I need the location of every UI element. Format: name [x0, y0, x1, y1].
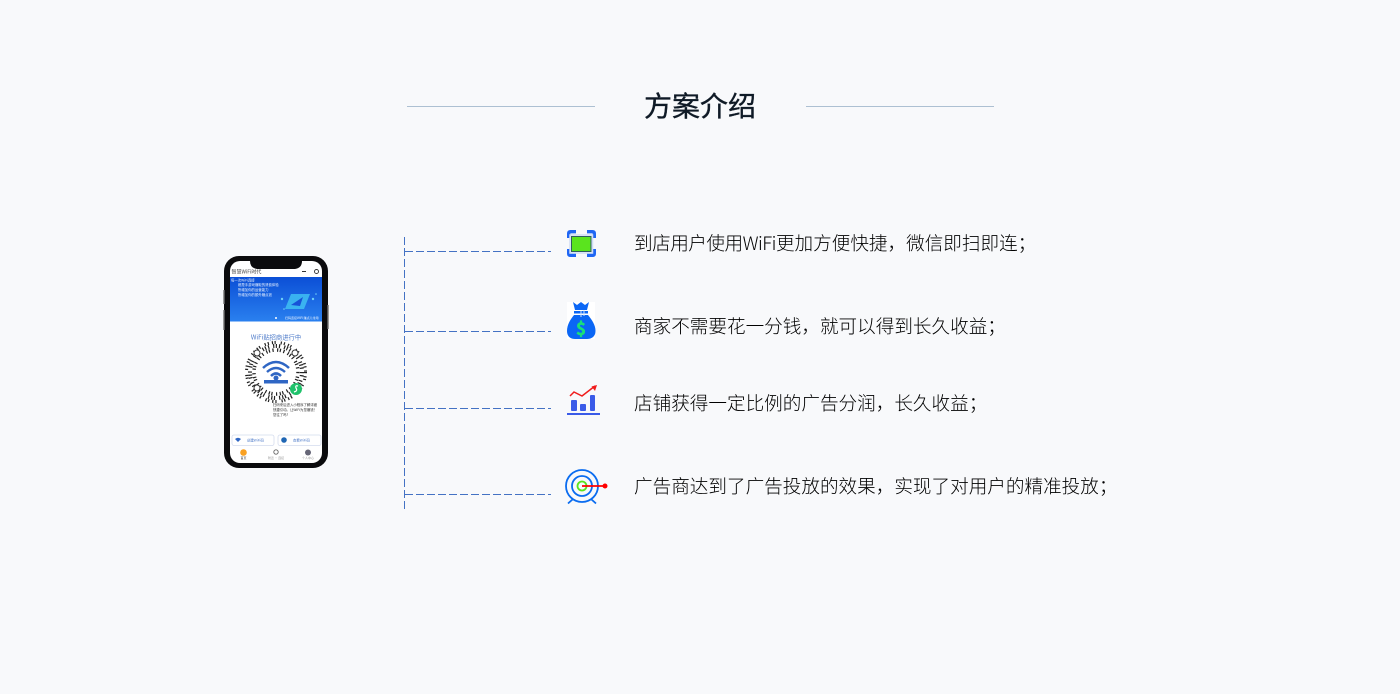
description: 扫码来后进入小程序了解详细	[273, 402, 318, 407]
recruiting heading: WiFi贴招商进行中	[251, 332, 301, 342]
button right: 查看WiFi码	[293, 438, 310, 442]
text: benefit 3: 店铺获得一定比例的广告分润，长久收益；	[634, 389, 987, 416]
tab bar: 附近 · 连接	[268, 455, 284, 460]
icon: scan frame	[569, 232, 594, 255]
title: 方案介绍	[644, 85, 756, 125]
icon: target	[566, 470, 608, 504]
title rule left	[407, 106, 595, 107]
banner: 每一次WiFi连接	[231, 278, 255, 282]
icon: money bag	[567, 302, 596, 340]
tab bar: 首页	[240, 455, 247, 460]
description: 您往了吗?	[273, 412, 289, 417]
QR mini-program code	[246, 342, 306, 402]
title rule right	[806, 106, 994, 107]
button right	[278, 435, 321, 446]
button left	[232, 435, 274, 446]
banner: 都是手游戏赚取的清费体验	[238, 282, 279, 287]
button left: 创建WiFi码	[247, 438, 264, 442]
banner: 所增加你的运营能力	[238, 287, 269, 292]
description	[273, 402, 318, 417]
description: 快捷引动。让WiFi为您赚钱！	[273, 407, 317, 412]
tab bar: 个人中心	[302, 455, 314, 460]
banner: 所增加你的额外赚点钱	[238, 292, 273, 297]
notch	[250, 261, 302, 269]
banner	[230, 277, 322, 322]
tab bar	[240, 449, 314, 460]
text: benefit 1: 到店用户使用WiFi更加方便快捷，微信即扫即连；	[634, 229, 1036, 256]
dashed connector tree	[404, 237, 551, 510]
icon: growth chart	[567, 385, 600, 415]
phone mockup	[223, 256, 329, 468]
app header: 智慧WiFi时代	[232, 268, 261, 276]
text: benefit 4: 广告商达到了广告投放的效果，实现了对用户的精准投放；	[634, 472, 1117, 499]
text: benefit 2: 商家不需要花一分钱，就可以得到长久收益；	[634, 312, 1006, 339]
banner: 扫码连接WiFi 赚点儿零用	[285, 315, 319, 320]
icon: money bag: $	[576, 315, 586, 340]
phone screen	[230, 261, 322, 463]
